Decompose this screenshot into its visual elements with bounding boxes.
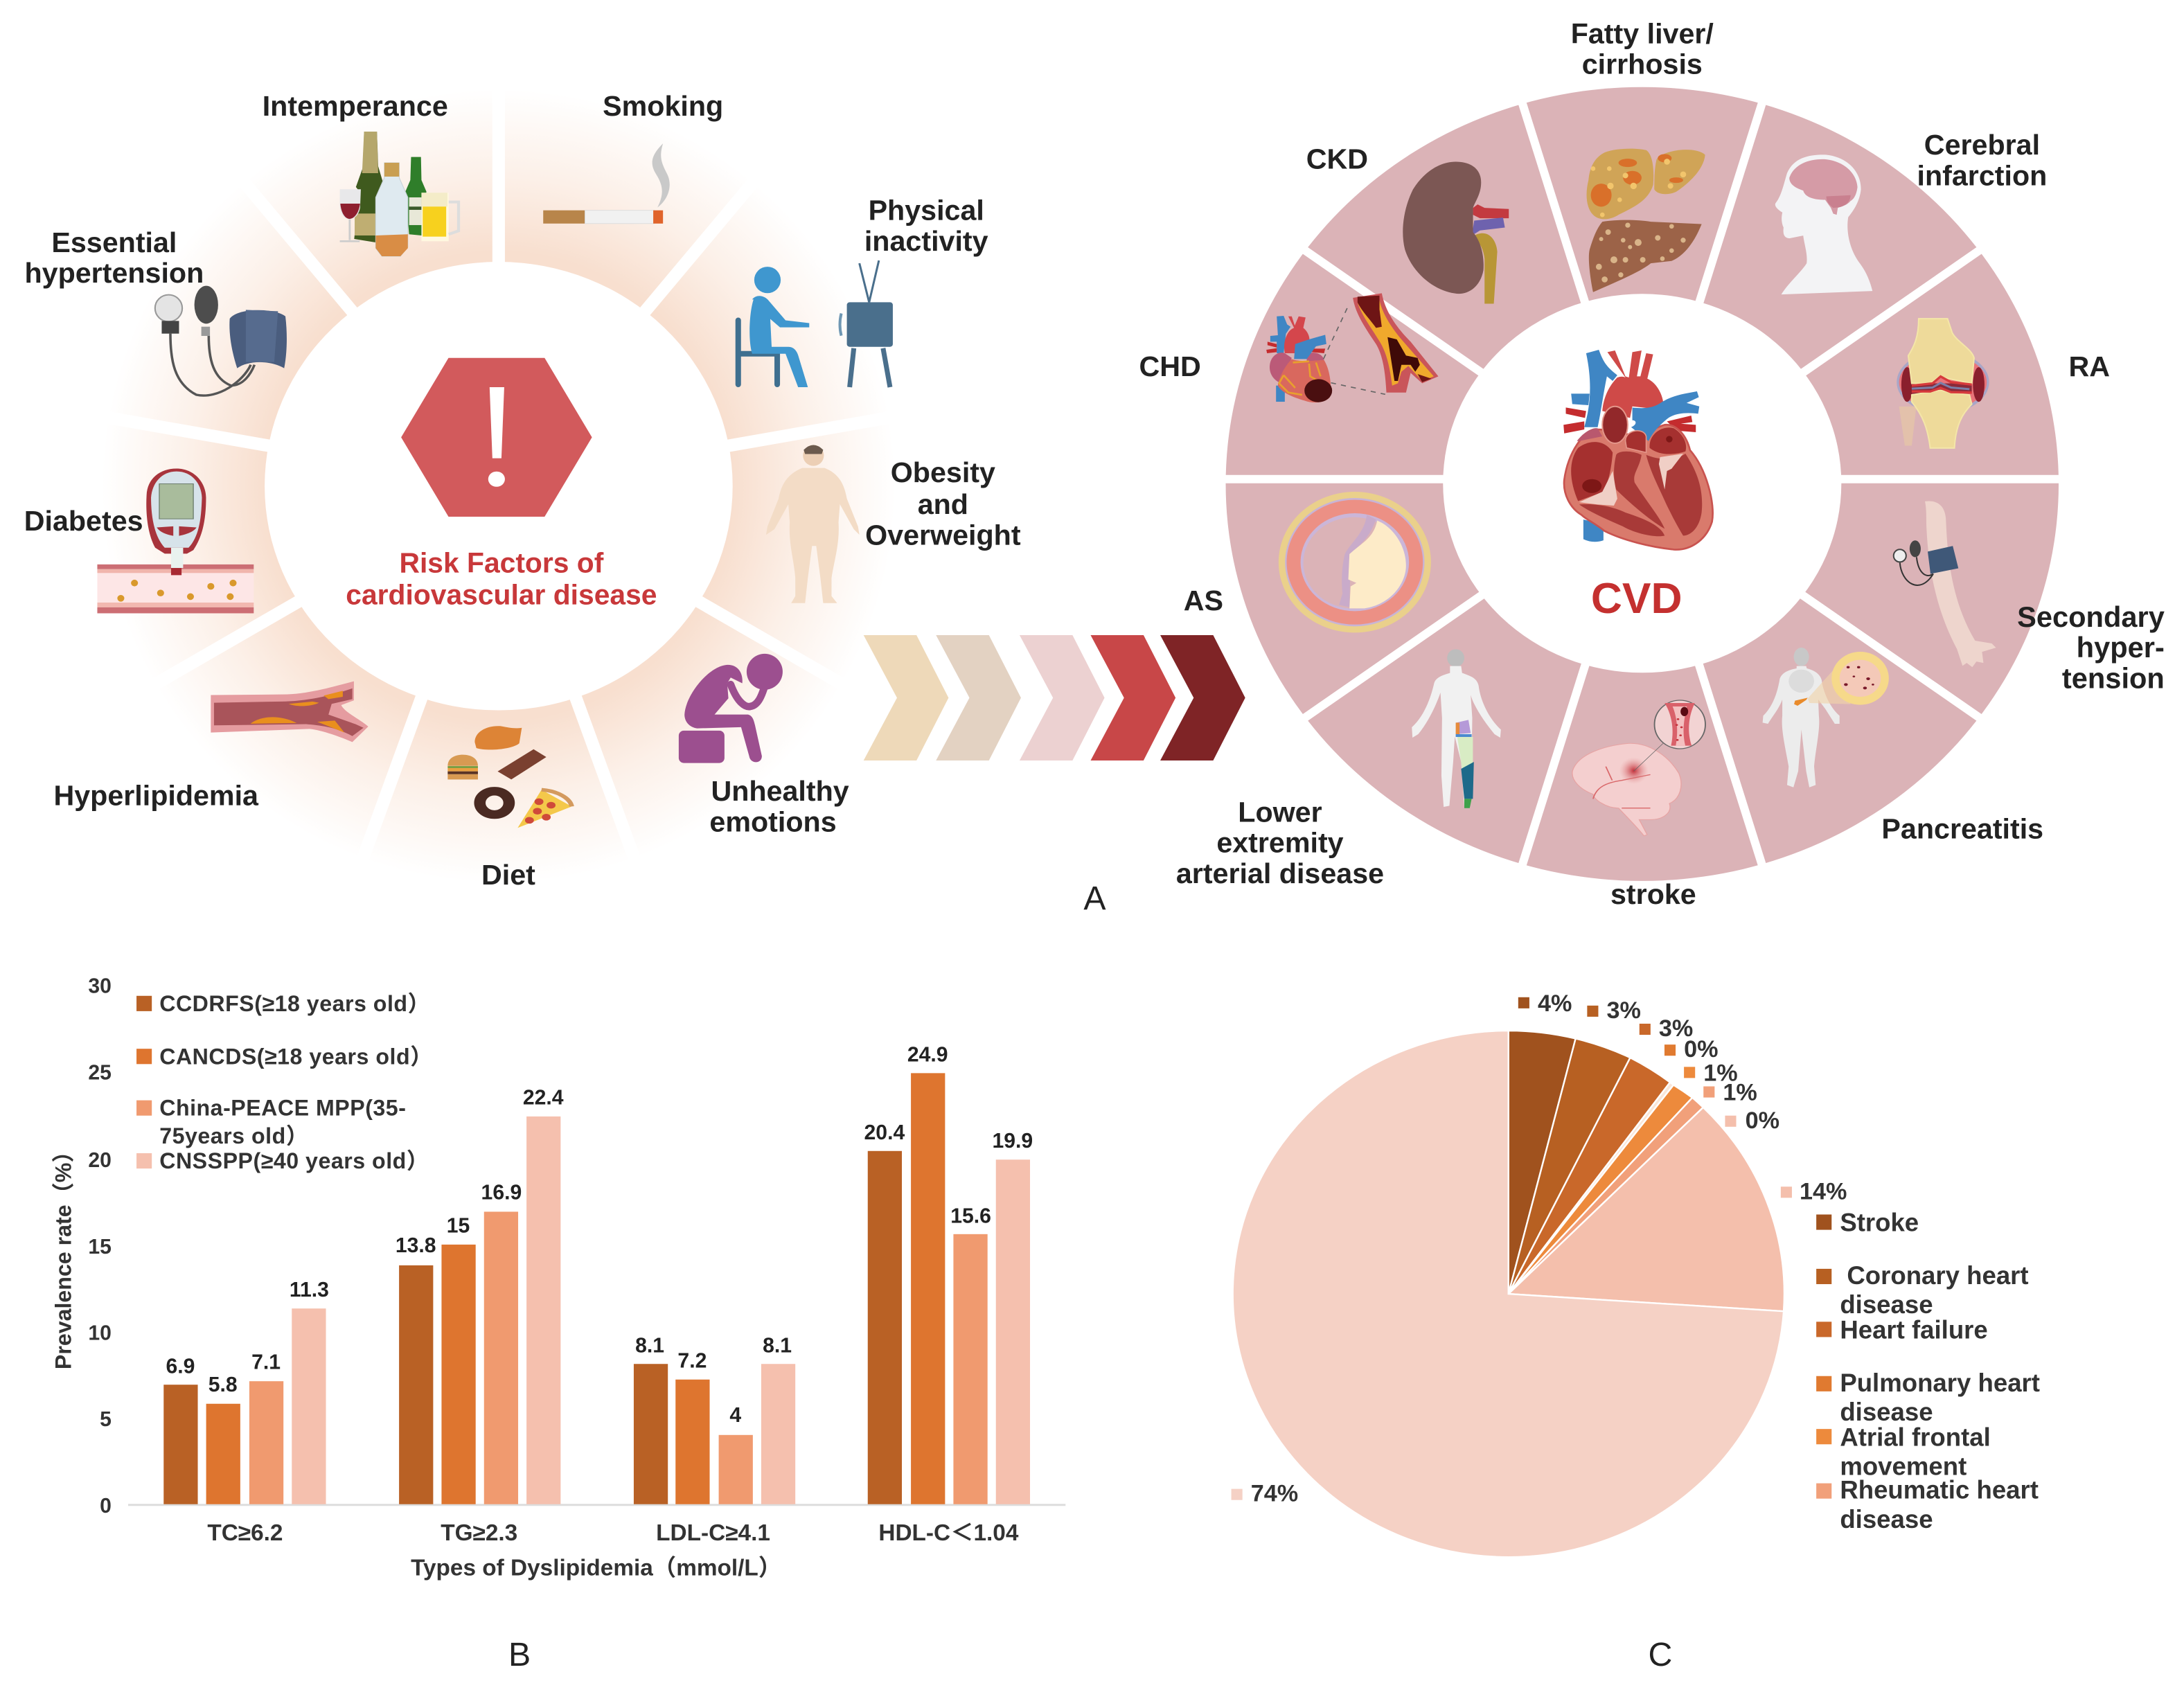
bar value labels: 7.1 [251, 1351, 281, 1374]
label: physical inactivity: inactivity [864, 225, 988, 257]
label: intemperance: Intemperance [263, 90, 448, 122]
bar chart legend: CANCDS(≥18 years old） [159, 1044, 433, 1069]
arrow: chevrons from risk factors to CVD [864, 635, 1245, 760]
icon: cigarette [543, 143, 670, 224]
bar chart legend: CNSSPP(≥40 years old） [159, 1148, 429, 1173]
bar chart legend: 75years old） [159, 1123, 308, 1148]
panel A: risk factors wheel [46, 55, 951, 918]
bar value labels: 6.9 [166, 1355, 195, 1378]
y axis ticks: 5 [100, 1408, 112, 1431]
y axis title: Prevalence rate（%） [51, 1140, 76, 1369]
label: diet: Diet [481, 859, 535, 891]
label: obesity and overweight: and [918, 488, 968, 520]
panel letter C: C [1648, 1636, 1672, 1673]
bar value labels: 24.9 [907, 1043, 948, 1066]
icon: fatty liver and cirrhosis [1587, 149, 1705, 292]
icon: kidney [1403, 161, 1509, 303]
bar value labels: 4 [729, 1404, 741, 1427]
icon: sad person [679, 654, 783, 763]
label: CHD: CHD [1139, 350, 1201, 382]
category labels: HDL-C＜1.04 [878, 1520, 1019, 1546]
pie legend: Heart failure [1840, 1315, 1988, 1344]
label: lower extremity arterial disease: extremity [1216, 827, 1344, 859]
bar chart legend: CCDRFS(≥18 years old） [159, 991, 430, 1016]
label: secondary hypertension: tension [2062, 661, 2165, 694]
icon: narrowed artery [211, 682, 369, 742]
bar value labels: 19.9 [993, 1130, 1033, 1153]
category labels: LDL-C≥4.1 [656, 1520, 770, 1546]
bar value labels: 20.4 [864, 1121, 905, 1144]
label: CKD: CKD [1306, 143, 1368, 175]
label: RA: RA [2068, 350, 2110, 382]
heading: risk factors of cardiovascular disease: cardiovascular disease [346, 579, 657, 611]
pie percentage labels: 1% [1723, 1080, 1757, 1106]
bars: LDL-C≥4.1 [634, 1364, 795, 1504]
category labels: TG≥2.3 [441, 1520, 517, 1546]
bars: TG≥2.3 [399, 1117, 560, 1504]
bar value labels: 7.2 [677, 1350, 707, 1373]
icon: arm with blood pressure cuff [1894, 501, 1996, 667]
pie legend: Rheumatic heart [1840, 1476, 2039, 1504]
label: fatty liver/cirrhosis: cirrhosis [1582, 48, 1703, 80]
pie percentage labels: 0% [1746, 1108, 1779, 1134]
heading: risk factors of cardiovascular disease: Risk Factors of [399, 546, 604, 578]
panel A: cardiovascular disease wheel [1198, 73, 2089, 896]
icon: coronary heart disease [1266, 293, 1439, 402]
bar value labels: 5.8 [208, 1373, 238, 1396]
panel C: pie chart of cardiovascular diseases [1233, 1031, 1784, 1557]
pie percentage labels: 3% [1659, 1015, 1693, 1042]
icon: overweight body [766, 445, 860, 603]
panel letter B: B [508, 1636, 531, 1673]
bar chart legend: China-PEACE MPP(35- [159, 1096, 406, 1121]
pie legend: disease [1840, 1505, 1933, 1533]
pie legend: Coronary heart [1847, 1261, 2029, 1290]
category labels [207, 1520, 1019, 1546]
label: pancreatitis: Pancreatitis [1881, 813, 2043, 845]
bar value labels: 8.1 [763, 1335, 792, 1358]
icon: head with brain [1775, 154, 1872, 294]
label: physical inactivity: Physical [869, 195, 984, 226]
icon: body with pancreas [1763, 648, 1889, 788]
icon: blood glucose meter in vessel [97, 469, 254, 613]
y axis ticks: 30 [88, 975, 112, 998]
y axis ticks: 0 [100, 1495, 112, 1518]
bar value labels: 11.3 [290, 1279, 329, 1301]
icon: knee joint [1897, 319, 1989, 448]
pie legend: movement [1840, 1452, 1967, 1481]
label: stroke: stroke [1610, 878, 1696, 910]
label: lower extremity arterial disease: arterial disease [1176, 857, 1384, 889]
icon: food [447, 726, 571, 828]
bar value labels: 22.4 [523, 1087, 564, 1110]
icon: person watching tv [738, 260, 893, 387]
label: essential hypertension: hypertension [24, 257, 204, 289]
label: unhealthy emotions: Unhealthy [711, 775, 849, 807]
pie percentage labels: 3% [1607, 997, 1641, 1024]
pie percentage labels: 1% [1703, 1060, 1738, 1086]
label: lower extremity arterial disease: Lower [1238, 796, 1322, 828]
pie percentage labels: 4% [1538, 990, 1572, 1017]
pie legend: Atrial frontal [1840, 1423, 1991, 1451]
label: obesity and overweight: Obesity [891, 456, 995, 488]
label: unhealthy emotions: emotions [709, 806, 837, 837]
bar chart legend [136, 991, 433, 1173]
heading: risk factors of cardiovascular disease [346, 546, 657, 611]
y axis ticks: 25 [88, 1061, 112, 1084]
bars: TC≥6.2 [163, 1308, 326, 1504]
label: essential hypertension: Essential [51, 226, 177, 258]
label: secondary hypertension: hyper- [2077, 631, 2165, 664]
icon: central heart [1563, 350, 1713, 550]
icon: alcoholic drinks [340, 132, 459, 256]
label: diabetes: Diabetes [24, 505, 143, 537]
y axis ticks: 15 [88, 1236, 112, 1258]
bar value labels: 13.8 [396, 1234, 436, 1257]
label: cerebral infarction: Cerebral [1924, 129, 2040, 161]
label: obesity and overweight: Overweight [865, 519, 1021, 551]
icon: brain with stroke [1572, 700, 1705, 836]
y axis ticks [88, 975, 112, 1518]
bar value labels [166, 1043, 1033, 1427]
bar value labels: 8.1 [635, 1335, 664, 1358]
x axis title: Types of Dyslipidemia（mmol/L） [411, 1555, 781, 1581]
bar value labels: 16.9 [481, 1181, 522, 1204]
bar value labels: 15 [447, 1215, 470, 1238]
pie legend: Stroke [1840, 1209, 1919, 1237]
label: smoking: Smoking [603, 90, 723, 122]
pie legend [1816, 1209, 2040, 1533]
pie legend: Pulmonary heart [1840, 1369, 2040, 1397]
pie percentage labels: 0% [1684, 1036, 1718, 1062]
panel B: bar chart of dyslipidemia prevalence [51, 975, 1065, 1581]
pie legend: disease [1840, 1290, 1933, 1319]
bars: HDL-C＜1.04 [868, 1073, 1030, 1504]
panel letter A: A [1083, 880, 1106, 917]
icon: warning hexagon [401, 358, 592, 517]
pie percentage labels: 14% [1800, 1178, 1847, 1204]
label: cerebral infarction: infarction [1917, 159, 2047, 191]
label: fatty liver/cirrhosis: Fatty liver/ [1571, 17, 1714, 49]
category labels: TC≥6.2 [207, 1520, 283, 1546]
y axis ticks: 10 [88, 1322, 112, 1344]
pie percentage labels [1232, 990, 1847, 1507]
label: AS: AS [1184, 585, 1223, 616]
label: hyperlipidemia: Hyperlipidemia [53, 779, 259, 811]
bar value labels: 15.6 [950, 1205, 991, 1228]
y axis ticks: 20 [88, 1149, 112, 1172]
pie percentage labels: 74% [1251, 1481, 1298, 1507]
label: secondary hypertension: Secondary [2017, 601, 2165, 633]
icon: atherosclerosis artery cross section [1279, 492, 1431, 632]
icon: blood pressure monitor [155, 286, 287, 395]
label: CVD: CVD [1591, 575, 1683, 623]
pie legend: disease [1840, 1398, 1933, 1426]
icon: body with leg arteries [1412, 649, 1501, 808]
